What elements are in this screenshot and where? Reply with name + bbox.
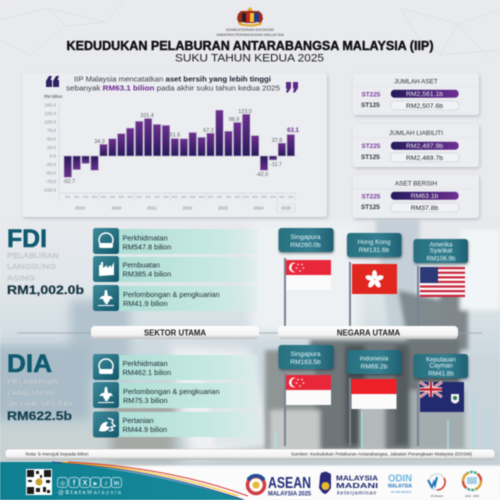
quarter labels [65, 195, 294, 199]
logo: SDG wheel [463, 472, 481, 498]
quarter labels: ST1 [208, 195, 214, 199]
sector row: perkhidmatan [93, 228, 258, 254]
ministry name [216, 28, 285, 37]
quarter labels: ST1 [244, 195, 249, 199]
footer: ◎ [60, 481, 65, 487]
FDI country: Amerika Syarikat [414, 239, 468, 326]
sector row: pertanian: Pertanian [122, 416, 154, 425]
y axis labels: 0.0 [50, 154, 56, 159]
DIA heading block: DILUAR NEGERI [7, 399, 72, 408]
quarter labels: ST1 [137, 195, 142, 199]
logo: ODIN: IN THE WORLD [391, 490, 411, 494]
quarter labels: ST4 [163, 195, 169, 199]
notes bar [5, 449, 495, 460]
footer: X [83, 480, 88, 487]
callout text [66, 76, 280, 92]
bar value labels: -11.7 [270, 162, 282, 168]
callout text: IIP Malaysia mencatatkan aset bersih yang lebih tinggi [74, 76, 271, 84]
closing quote mark [286, 82, 298, 92]
panel: jumlah liabiliti: JUMLAH LIABILITI [389, 130, 443, 137]
panel: DIA sectors [93, 354, 258, 438]
y axis labels: 50.0 [47, 137, 56, 142]
band: negara utama: NEGARA UTAMA [337, 328, 400, 338]
quarter labels: ST2 [181, 195, 187, 199]
quarter labels: ST1 [172, 195, 178, 199]
FDI country: Amerika Syarikat: Amerika [429, 241, 453, 248]
footer: f [73, 480, 76, 487]
quarter labels: ST4 [235, 195, 240, 199]
quarter labels: ST4 [92, 195, 98, 199]
quarter labels: ST2 [288, 195, 294, 199]
year labels: 2020 [112, 206, 122, 210]
FDI country: Hong Kong: RM131.6b [359, 247, 390, 254]
panel: jumlah liabiliti [353, 124, 479, 167]
footer: in [114, 481, 119, 487]
header: ministry crest [237, 7, 263, 26]
y axis labels: -25.0 [46, 162, 56, 167]
panel: jumlah liabiliti: RM2,469.7b [406, 155, 443, 162]
y axis labels: 100.0 [44, 120, 56, 125]
y axis labels: -50.0 [46, 171, 56, 176]
logo: Malaysia Madani: MADANI [336, 481, 378, 490]
bar value labels: -62.7 [63, 179, 75, 185]
quarter labels: ST2 [217, 195, 222, 199]
logo: ASEAN Malaysia 2025 [248, 475, 312, 498]
DIA country: Singapura: Singapura [290, 351, 321, 358]
DIA heading block: LANGSUNG [7, 388, 56, 397]
logo: ASEAN Malaysia 2025: MALAYSIA 2025 [268, 492, 312, 498]
panel: jumlah liabiliti: ST125 [361, 154, 380, 161]
FDI country: Amerika Syarikat: RM106.9b [426, 256, 456, 262]
FDI country: Singapura: RM260.0b [290, 242, 321, 249]
DIA country: Kepulauan Cayman: Cayman [429, 362, 453, 370]
logo: SDG wheel: 2016 - 2030 [465, 494, 479, 498]
quarter labels: ST3 [154, 195, 160, 199]
panel: aset bersih: ST125 [361, 204, 380, 211]
logo: ODIN: ODIN [388, 474, 412, 484]
y axis labels: 150.0 [44, 103, 56, 108]
footer: ▶ [94, 481, 98, 487]
quarter labels: ST3 [83, 195, 89, 199]
quarter labels: ST3 [261, 195, 267, 199]
title: KEDUDUKAN PELABURAN ANTARABANGSA MALAYSIA (IIP) [66, 39, 434, 53]
panel: aset bersih: ST225 [362, 193, 381, 200]
footer: ♪ [104, 480, 108, 487]
y axis labels: 125.0 [44, 111, 56, 116]
bar value labels: 34.3 [94, 139, 105, 145]
panel: aset bersih: ASET BERSIH [395, 180, 437, 188]
quarter labels: ST4 [199, 195, 205, 199]
year labels: 2021 [147, 206, 157, 210]
sector row: pembuatan [93, 256, 258, 282]
FDI country: Hong Kong: Hong Kong [358, 239, 391, 246]
DIA country: Singapura [278, 345, 334, 446]
band: negara utama [278, 326, 458, 339]
quarter labels: ST3 [190, 195, 196, 199]
logo: ASEAN Malaysia 2025: ASEAN [268, 475, 311, 492]
bar value labels: 37.8 [272, 138, 282, 144]
DIA heading block [7, 350, 72, 423]
band: sektor utama: SEKTOR UTAMA [144, 328, 206, 338]
DIA heading block: RM622.5b [7, 411, 72, 423]
DIA country: Indonesia: RM69.2b [361, 364, 388, 370]
bar value labels: -42.0 [256, 172, 268, 178]
panel: jumlah aset: RM2,561.1b [406, 91, 443, 98]
opening quote mark [46, 76, 59, 87]
DIA heading block: DIA [7, 350, 52, 378]
year labels: 2024 [254, 206, 264, 210]
sector row: perkhidmatan: Perkhidmatan [122, 359, 168, 368]
sector row: pertanian: RM44.9 bilion [122, 425, 167, 434]
quarter labels: ST3 [119, 195, 124, 199]
quarter labels: ST1 [65, 195, 71, 199]
social handle: @Stats Malaysia [58, 490, 122, 496]
bar value labels: 67.2 [203, 128, 214, 134]
sector row: perkhidmatan: RM462.1 bilion [122, 368, 171, 377]
panel: aset bersih: RM37.8b [411, 205, 439, 212]
logo: Malaysia Madani [319, 472, 379, 496]
FDI country: Singapura: Singapura [290, 234, 321, 241]
ministry name: JABATAN PERANGKAAN MALAYSIA [216, 33, 285, 37]
panel: jumlah aset: RM2,507.6b [406, 103, 443, 110]
logo: World Statistics Day [428, 474, 445, 498]
FDI heading block: FDI [7, 225, 47, 253]
quarter labels: ST2 [253, 195, 258, 199]
source text: Sumber: Kedudukan Pelaburan Antarabangsa, Jabatan Perangkaan Malaysia (DOSM) [291, 452, 473, 456]
FDI country: Amerika Syarikat: Syarikat [430, 247, 453, 254]
panel: bar chart card [22, 73, 327, 217]
FDI country: Hong Kong [347, 233, 402, 326]
bar value labels: 63.1 [287, 128, 299, 134]
logo: ODIN [388, 474, 412, 494]
band: sektor utama [91, 326, 259, 339]
quarter labels: ST1 [279, 195, 285, 199]
panel: jumlah aset: ST225 [362, 91, 381, 98]
ministry name: KEMENTERIAN EKONOMI [226, 28, 274, 32]
callout text: sebanyak RM63.1 bilion pada akhir suku tahun kedua 2025 [66, 86, 280, 92]
sector row: perkhidmatan: Perkhidmatan [122, 233, 168, 242]
sector row: perkhidmatan [93, 354, 258, 380]
bar value labels: 98.9 [229, 117, 239, 123]
year labels: 2022 [183, 206, 193, 210]
sector row: perkhidmatan: RM547.8 bilion [122, 242, 171, 252]
panel: aset bersih [353, 175, 479, 218]
y axis labels: -100.0 [43, 188, 56, 193]
footer [0, 462, 500, 500]
DIA country: Indonesia: Indonesia [360, 356, 389, 362]
y axis labels: 25.0 [47, 145, 56, 150]
sector row: perlombongan [93, 285, 258, 311]
year labels: 2019 [75, 206, 85, 210]
y axis labels: -75.0 [46, 179, 56, 184]
quarter labels: ST4 [128, 195, 133, 199]
DIA country: Kepulauan Cayman [414, 354, 468, 446]
sector row: perlombongan: RM75.3 bilion [123, 396, 168, 405]
DIA country: Kepulauan Cayman: Kepulauan [426, 356, 457, 364]
FDI heading block: ASING [7, 274, 35, 282]
year labels [75, 206, 291, 210]
sector row: pembuatan: Pembuatan [122, 260, 160, 270]
quarter labels: ST2 [146, 195, 151, 199]
quarter labels: ST2 [74, 195, 80, 199]
FDI heading block: LANGSUNG [7, 262, 56, 271]
quarter labels: ST2 [110, 195, 115, 199]
year labels: 2023 [218, 206, 228, 210]
logo: Malaysia Madani: MALAYSIA [336, 474, 379, 482]
sector row: perlombongan: RM41.9 bilion [123, 299, 168, 308]
bar value labels: 51.6 [170, 132, 180, 138]
FDI heading block [7, 225, 84, 297]
QR code [26, 469, 52, 495]
logo: World Statistics Day: 20 Oktober [431, 494, 444, 498]
DIA country: Kepulauan Cayman: RM41.8b [428, 370, 454, 378]
panel: FDI sectors [93, 228, 258, 311]
panel: jumlah aset [353, 73, 479, 115]
sector row: perlombongan [93, 382, 258, 408]
logo: ODIN: MALAYSIA [388, 484, 412, 490]
logo: Malaysia Madani: keterjaminan [337, 490, 376, 496]
quarter labels: ST3 [226, 195, 231, 199]
bar value labels [63, 109, 299, 185]
section band line [17, 332, 482, 334]
axis unit: RM billion [44, 94, 63, 99]
bars [64, 110, 295, 177]
DIA heading block: PELABURAN [7, 377, 59, 386]
panel: jumlah aset: ST125 [361, 102, 380, 109]
panel: jumlah liabiliti: RM2,497.9b [406, 143, 443, 150]
sector row: perlombongan: Perlombongan & pengkuarian [123, 387, 220, 396]
DIA country: Indonesia [347, 350, 402, 446]
y axis labels [43, 103, 56, 193]
sector row: pertanian [93, 412, 258, 438]
FDI country: Singapura [278, 228, 334, 326]
note text: Nota: b merujuk kepada bilion [26, 452, 89, 456]
quarter labels: ST1 [101, 195, 107, 199]
panel: jumlah aset: JUMLAH ASET [394, 78, 438, 86]
panel: jumlah liabiliti: ST225 [362, 143, 381, 150]
subtitle: SUKU TAHUN KEDUA 2025 [175, 52, 324, 64]
social icons [58, 478, 122, 488]
bar value labels: 101.4 [140, 113, 154, 119]
sector row: perlombongan: Perlombongan & pengkuarian [123, 290, 220, 299]
bar value labels: 123.0 [238, 109, 252, 115]
FDI heading block: PELABURAN [7, 251, 59, 260]
year labels: 2025 [281, 206, 291, 210]
FDI heading block: RM1,002.0b [7, 285, 84, 297]
DIA country: Singapura: RM163.5b [290, 359, 321, 366]
panel: aset bersih: RM63.1b [411, 193, 439, 200]
y axis labels: 75.0 [47, 128, 56, 133]
sector row: pembuatan: RM385.4 bilion [122, 270, 171, 279]
quarter labels: ST4 [270, 195, 276, 199]
